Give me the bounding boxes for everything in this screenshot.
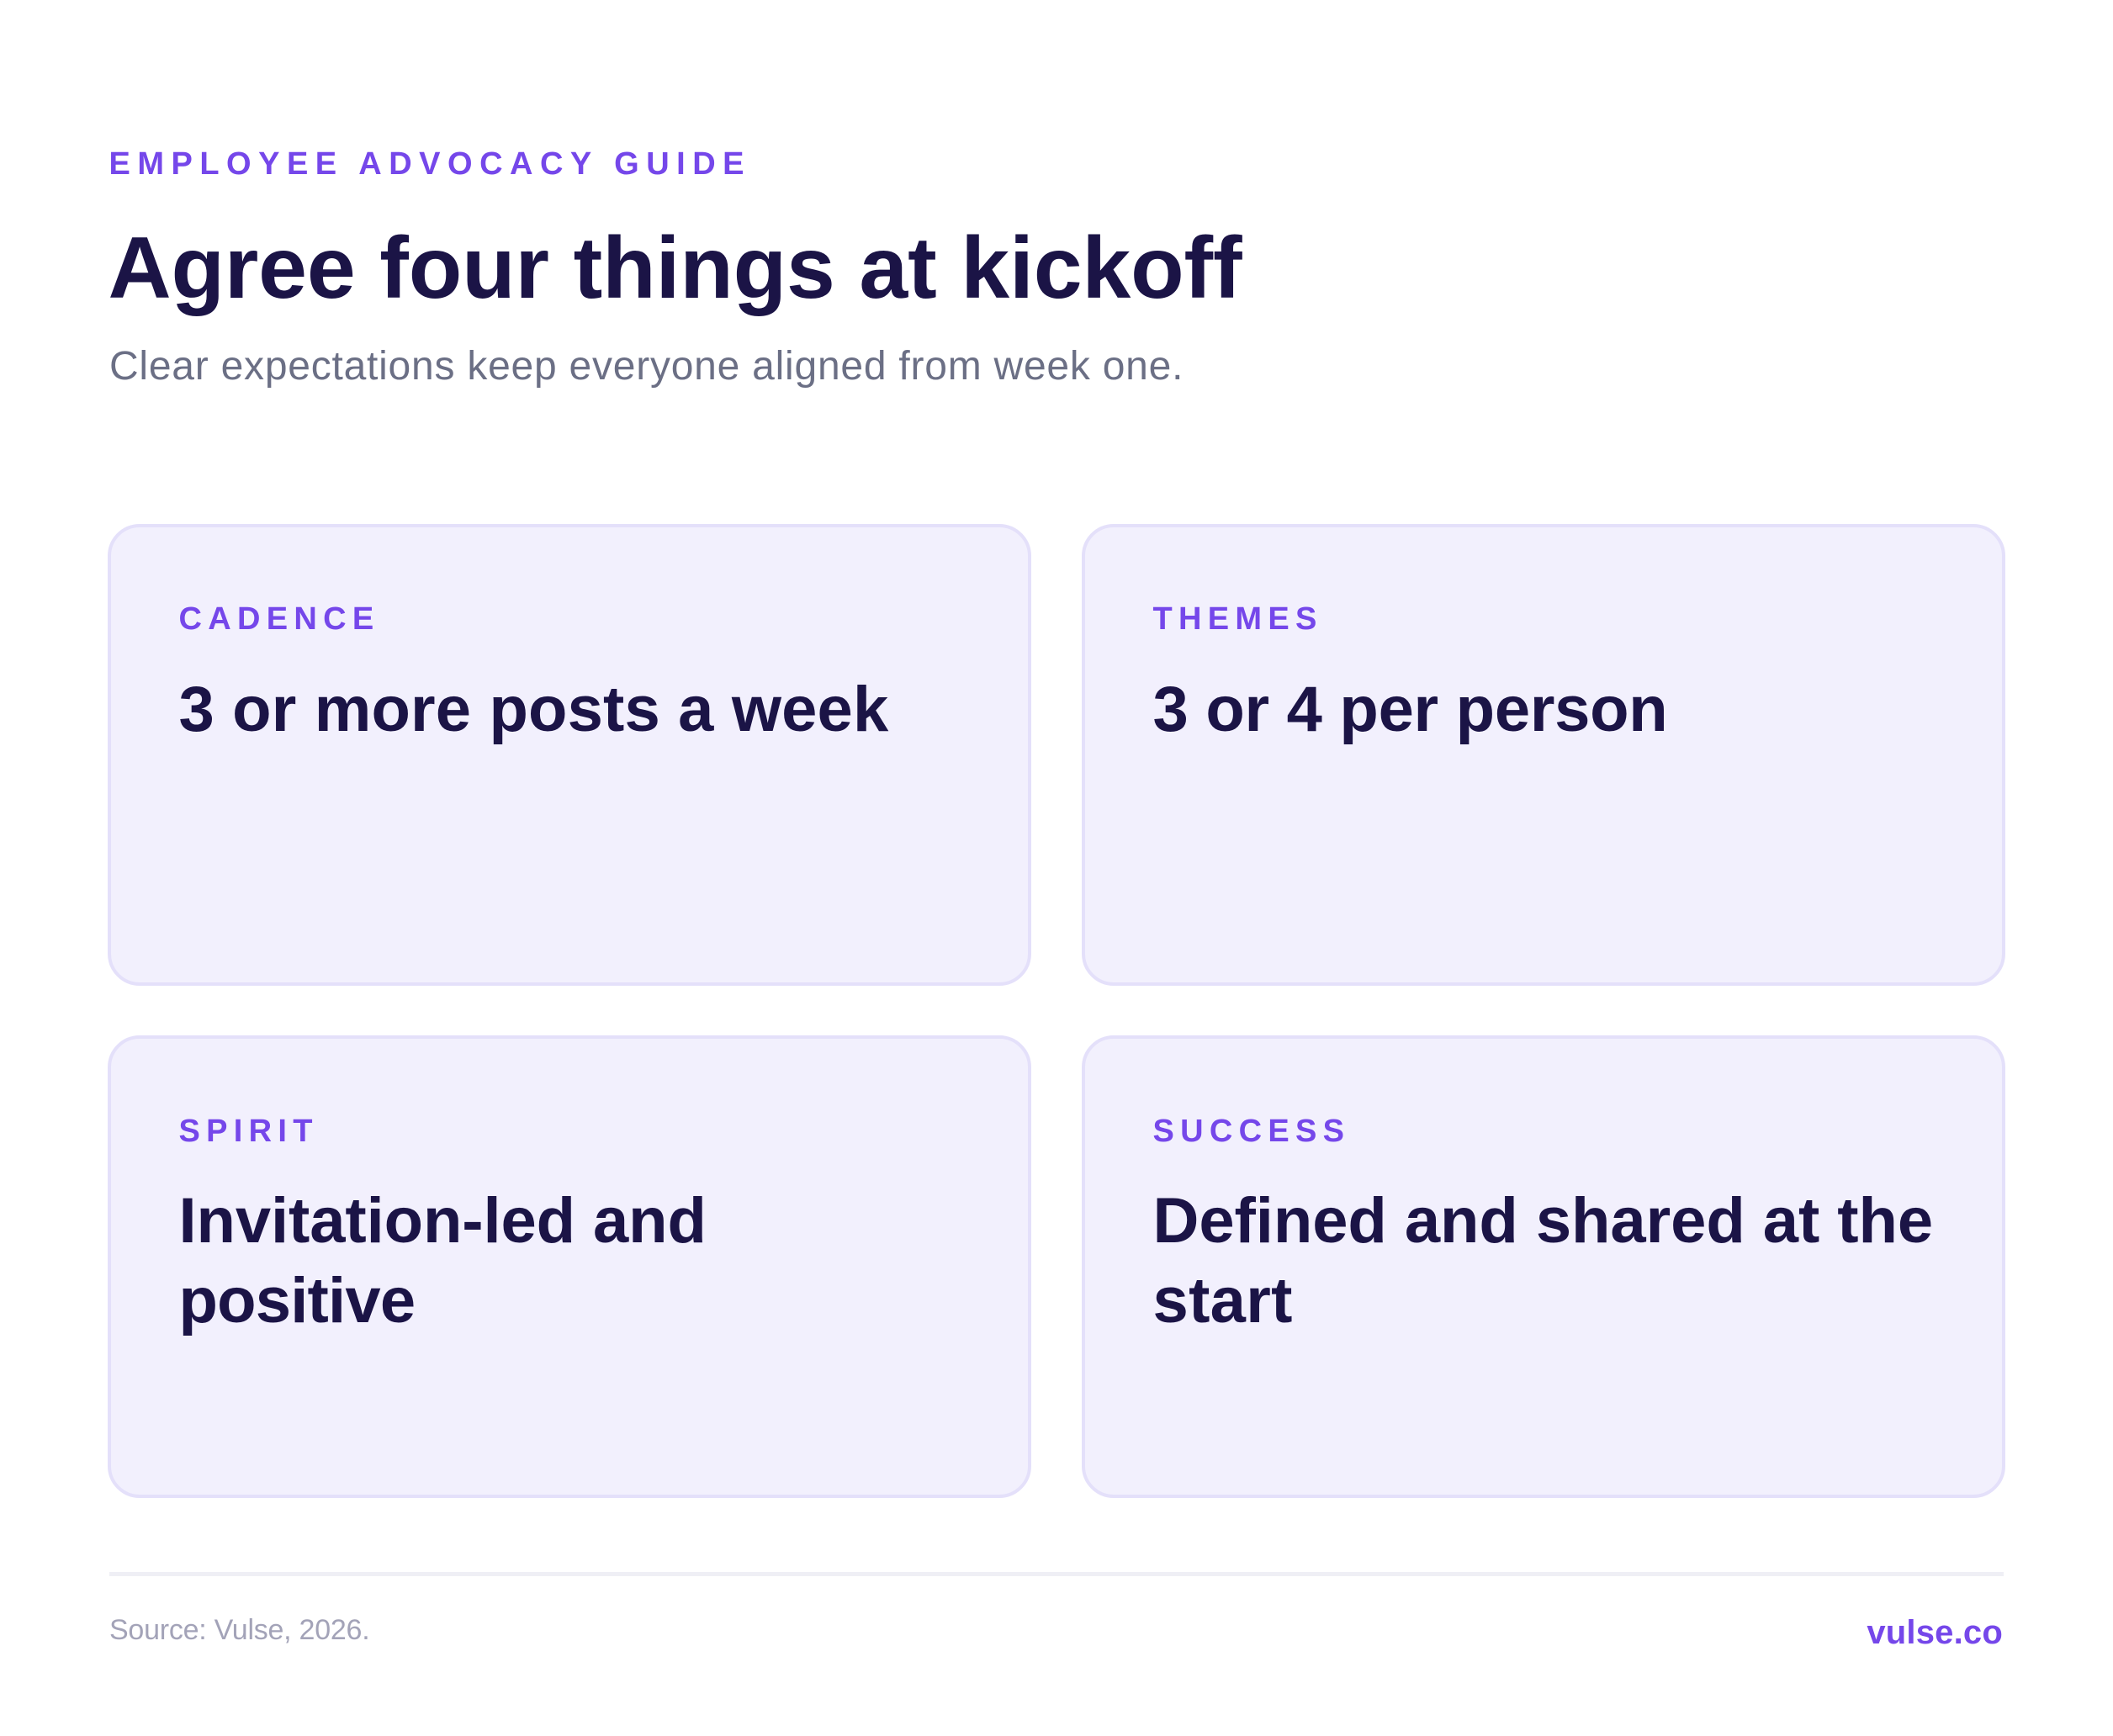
panel: themes bbox=[1082, 524, 2005, 986]
label: success: SUCCESS bbox=[1152, 1114, 1350, 1149]
value: spirit: Invitation-led and bbox=[178, 1185, 707, 1257]
value: spirit bbox=[178, 1185, 707, 1336]
value: success: start bbox=[1152, 1265, 1293, 1336]
source note: Source: Vulse, 2026. bbox=[109, 1614, 369, 1646]
panel: success bbox=[1082, 1035, 2005, 1498]
label: spirit: SPIRIT bbox=[178, 1114, 319, 1149]
label: cadence: CADENCE bbox=[178, 601, 380, 637]
value: success: Defined and shared at the bbox=[1152, 1185, 1933, 1257]
panel: spirit bbox=[108, 1035, 1031, 1498]
value: success bbox=[1152, 1185, 1933, 1336]
label: themes: THEMES bbox=[1152, 601, 1323, 637]
value: spirit: positive bbox=[178, 1265, 415, 1336]
panel: cadence bbox=[108, 524, 1031, 986]
value: cadence: 3 or more posts a week bbox=[178, 673, 888, 745]
eyebrow: EMPLOYEE ADVOCACY GUIDE bbox=[109, 146, 751, 182]
subtitle: Clear expectations keep everyone aligned from week one. bbox=[109, 344, 1184, 389]
brand link: vulse.co bbox=[1867, 1614, 2003, 1651]
title: Agree four things at kickoff bbox=[108, 219, 1242, 316]
value: themes: 3 or 4 per person bbox=[1152, 673, 1667, 745]
